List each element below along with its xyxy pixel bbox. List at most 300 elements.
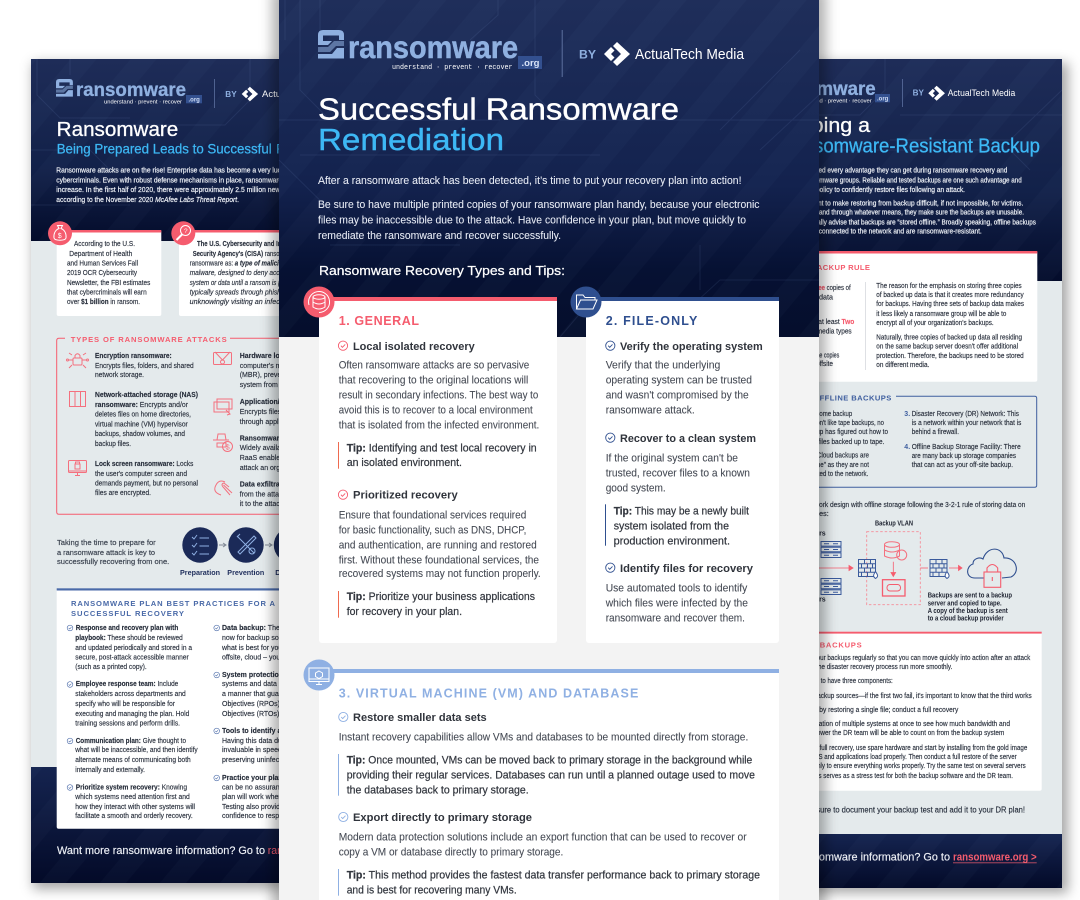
practices column 2: systems and data are <box>222 681 289 688</box>
practices column 1 <box>67 625 198 820</box>
right intro: ransomware groups. Reliable and tested backups are one such advantage and <box>804 178 1022 185</box>
left intro <box>56 168 297 204</box>
item: local isolated recovery: result in secondary infections. The best way to <box>339 389 538 401</box>
attack type list column 1: backups, shadow volumes, and <box>95 431 185 438</box>
card: 3-2-1 backup rule: for backups. Having three sets of backup data makes <box>876 301 1024 308</box>
card: 3-2-1 backup rule: at least Two <box>818 319 854 326</box>
left footer band: Want more ransomware information? Go to <box>57 845 265 857</box>
tip: once mounted: providing their regular services. Databases can run until a planned outage used to move <box>347 769 755 781</box>
right title: Developing a <box>745 115 871 137</box>
main title: Remediation <box>318 122 504 157</box>
card: testing backups: by restoring a single file; conduct a full recovery <box>819 707 959 714</box>
practices column 1: executing and managing the plan. Hold <box>75 711 189 718</box>
left title: Recovery <box>276 140 335 156</box>
attack type list column 2: (MBR), preventing <box>240 372 297 379</box>
item: restore smaller data sets: Instant recovery capabilities allow VMs and databases to be mounted directly from storage. <box>339 731 748 743</box>
icon: hardware lock <box>214 352 232 364</box>
card: CISA definition: typically spreads through phishing <box>190 290 290 297</box>
card: HHS statistic <box>57 230 161 316</box>
right footer band: Want more ransomware information? Go to <box>742 852 950 864</box>
left footer band <box>31 767 344 883</box>
icon: database restore <box>304 286 334 318</box>
tip: newly built system: system isolated from the <box>614 520 729 532</box>
connector <box>920 567 928 569</box>
practices column 2: now for backup solutions <box>222 635 300 642</box>
arrow <box>219 543 226 547</box>
panel: best practices: SUCCESSFUL RECOVERY <box>71 609 184 618</box>
practices column 1: Response and recovery plan with <box>76 625 178 632</box>
panel: virtual machine and database <box>304 660 779 900</box>
practices column 2: Having this data during <box>222 738 294 745</box>
item: restore smaller data sets: Restore smaller data sets <box>353 712 487 724</box>
panel: offline backups: behind a firewall. <box>912 429 959 436</box>
card: 3-2-1 backup rule: One copies <box>812 352 840 359</box>
item: local isolated recovery: that is isolated from the infected environment. <box>339 419 539 431</box>
practices column 1: playbook: These should be reviewed <box>75 635 183 642</box>
intro text: files may be inaccessible due to the attack. Have confidence in your plan, but move quickly to <box>318 214 746 226</box>
card: 3-2-1 backup rule: Three copies of <box>809 285 851 292</box>
item: prioritized recovery: Ensure that foundational services required <box>339 509 526 521</box>
network design caption: network design with offline storage following the 3-2-1 rule of storing data on <box>805 502 1025 509</box>
right logo: ActualTech Media <box>948 88 1016 99</box>
icon: tape <box>882 580 905 596</box>
icon: magnet <box>215 481 232 495</box>
panel: offline backups: ected to the network. <box>811 471 868 478</box>
left logo: understand · prevent · recover <box>104 99 182 105</box>
left logo: BY <box>225 90 237 99</box>
item: verify the operating system: Verify that the underlying <box>606 359 720 371</box>
tip: local recovery: Tip: Identifying and test local recovery in <box>347 442 537 454</box>
intro text: remediate the ransomware and recover successfully. <box>318 230 561 242</box>
item: prioritized recovery: and authentication, are running and restored <box>339 539 537 551</box>
card: 3-2-1 backup rule: your data <box>803 294 833 301</box>
item: prioritized recovery: for basic functionality, such as DNS, DHCP, <box>339 524 526 536</box>
left logo: ransomware <box>76 79 186 101</box>
diagram caption: A copy of the backup is sent <box>928 608 1008 615</box>
practices column 2: System protection <box>222 672 283 679</box>
item: local isolated recovery <box>338 341 539 431</box>
left logo: ActualTech <box>262 89 308 100</box>
practices column 1: training sessions and perform drills. <box>75 720 180 727</box>
right footer band: ransomware.org > <box>953 852 1037 864</box>
card: HHS statistic: Department of Health <box>69 251 132 258</box>
tip: once mounted <box>338 754 755 796</box>
item: local isolated recovery: avoid this is to recover to a local environment <box>339 404 533 416</box>
network diagram: ers <box>815 531 826 538</box>
attack type list column 2: system from getting <box>240 382 301 389</box>
main logo: BY <box>579 50 596 62</box>
attack type list column 1: Lock screen ransomware: Locks <box>95 461 194 468</box>
panel: offline backups: Offline Backup Storage Facility: There <box>912 444 1021 451</box>
item: local isolated recovery: Local isolated recovery <box>353 341 475 353</box>
left title: Ransomware <box>57 119 178 141</box>
preparation lifecycle text <box>57 538 169 566</box>
practices column 2: invaluable in speeding <box>222 747 291 754</box>
intro text <box>318 175 760 242</box>
attack type list column 2: Encrypts files <box>240 409 282 416</box>
attack type list column 2: Ransomware as <box>240 436 293 443</box>
preparation lifecycle text: Taking the time to prepare for <box>57 538 156 547</box>
card: testing backups: to have three components: <box>821 678 893 685</box>
card: CISA definition: Security Agency's (CISA) ransomw <box>193 251 289 258</box>
practices column 2: Practice your plan: <box>222 775 285 782</box>
heading: 2. file-only: 2. FILE-ONLY <box>606 314 698 328</box>
card: testing backups: OS and applications load properly. Then conduct a full restore of the server <box>814 754 1017 761</box>
main logo: .org <box>522 58 540 69</box>
item: export directly to primary storage <box>339 812 747 858</box>
right intro: connected to the network and are ransomware-resistant. <box>819 229 982 236</box>
arrow <box>265 543 272 547</box>
tip: business applications: Tip: Prioritize your business applications <box>347 591 536 603</box>
panel: offline backups: 3. <box>904 411 910 418</box>
left intro: Ransomware attacks are on the rise! Enterprise data has become a very lucrative <box>56 168 297 175</box>
diagram caption: Backups are sent to a backup <box>928 593 1012 600</box>
icon: money bag: $ <box>58 233 62 240</box>
attack type list column 1: the user's computer screen and <box>95 471 187 478</box>
icon: magnifier: ? <box>184 228 188 235</box>
item: prioritized recovery: recovered systems may not function properly. <box>339 568 541 580</box>
card: 3-2-1 backup rule: The reason for the emphasis on storing three copies <box>876 283 1022 290</box>
right logo: ransomware <box>766 78 876 100</box>
practices column 2: a manner that guarantees <box>222 691 303 698</box>
practices column 1: Employee response team: Include <box>76 681 178 688</box>
tip: once mounted: the databases back to primary storage. <box>347 784 529 796</box>
left footer band: ransomware.org <box>268 845 344 857</box>
tip: once mounted: Tip: Once mounted, VMs can be moved back to primary storage in the background while <box>347 754 752 766</box>
icon: hacker with dollar <box>213 434 232 452</box>
attack type list column 1: virtual machine (VM) hypervisor <box>95 421 188 428</box>
practices column 1: what will be inaccessible, and then identify <box>74 747 198 754</box>
attack type list column 1: Encrypts files, folders, and shared <box>95 363 194 370</box>
right logo: .org <box>877 96 889 102</box>
center page: Successful Ransomware Remediation <box>272 0 826 900</box>
icon: firewall <box>858 560 878 578</box>
card: 3-2-1 backup rule: protection. Therefore, the backups need to be stored <box>876 353 1024 360</box>
practices column 2: plan will work when <box>222 794 282 801</box>
card: HHS statistic: According to the U.S. <box>74 241 135 248</box>
panel: offline backups: don't like tape backups, no <box>813 420 884 427</box>
card: testing backups: the disaster recovery process run more smoothly. <box>816 664 952 671</box>
network design caption <box>805 502 1025 518</box>
card: testing backups: power the DR team will be able to count on from the backup system <box>813 730 1004 737</box>
icon: VM monitor <box>304 660 334 690</box>
left page: Being Prepared <box>31 59 344 889</box>
panel: offline backups: some backup <box>816 411 852 418</box>
item: prioritized recovery: Prioritized recovery <box>353 490 458 502</box>
practices column 1: Prioritize system recovery: Knowing <box>76 784 187 791</box>
card: 3-2-1 backup rule: it less likely a ransomware group will be able to <box>876 311 1006 318</box>
arrow: database to tape <box>891 562 896 576</box>
item: restore smaller data sets <box>339 712 748 743</box>
network design caption: types: <box>810 511 829 518</box>
left title <box>57 119 335 156</box>
practices column 2: Testing also provides <box>222 804 288 811</box>
left logo <box>56 79 308 108</box>
practices column 1: facilitate a smooth and orderly recovery. <box>75 813 193 820</box>
card: 3-2-1 backup rule: on the same backup server doesn't offer additional <box>876 343 1018 350</box>
card: CISA definition: malware, designed to deny access <box>190 270 290 277</box>
right intro: and through whatever means, they make sure the backups are unusable. <box>819 210 1024 217</box>
network diagram <box>815 521 1016 622</box>
icon: prevention tools <box>228 527 264 563</box>
attack type list column 2: RaaS enables <box>240 455 284 462</box>
item: verify the operating system: operating system can be trusted <box>606 374 752 386</box>
intro text: Be sure to have multiple printed copies of your ransomware plan handy, because your electronic <box>318 199 760 211</box>
right logo: BY <box>913 89 925 98</box>
panel: offline backups: is a network within your network that is <box>912 420 1022 427</box>
icon: cloud with lock <box>968 549 1016 587</box>
tip: local recovery <box>338 442 537 469</box>
practices column 1: stakeholders across departments and <box>75 691 186 698</box>
right intro: policy to confidently restore files following an attack. <box>816 187 965 194</box>
icon: network lock <box>66 353 88 368</box>
icon: NAS drives <box>70 392 86 406</box>
panel: types of ransomware attacks <box>57 335 308 514</box>
practices column 1: secure, post-attack accessible manner <box>75 654 189 661</box>
left title: Being Prepared Leads to Successful <box>57 140 272 156</box>
practices column 2: can be no assurance <box>222 784 287 791</box>
icon: hacker with dollar: $ <box>226 444 230 452</box>
practices column 2: Data backup: There are <box>222 625 298 632</box>
card: testing backups: This serves as a stress test for both the backup software and the DR team. <box>810 773 1013 780</box>
main logo <box>318 29 745 77</box>
icon: preparation checklist <box>182 527 218 563</box>
panel: offline backups: files backed up to tape. <box>818 439 884 446</box>
left intro: according to the November 2020 McAfee Labs Threat Report. <box>56 197 239 204</box>
item: export directly to primary storage: copy a VM or database directly to primary storage. <box>339 846 563 858</box>
item: export directly to primary storage: Modern data protection solutions include an export function that can be used to recover or <box>339 831 747 843</box>
attack type list column 2: Widely available <box>240 445 290 452</box>
attack type list column 1: ransomware: Encrypts and/or <box>95 402 189 409</box>
panel: offline backups: 4. <box>904 444 910 451</box>
card: HHS statistic: Newsletter, the FBI estimates <box>67 280 151 287</box>
item: prioritized recovery: first. Without these foundational services, the <box>339 554 539 566</box>
preparation lifecycle text: successfully recovering from one. <box>57 557 169 566</box>
icon: detection <box>274 527 309 563</box>
tip: business applications <box>338 591 536 618</box>
tip: fastest data transfer: Tip: This method provides the fastest data transfer performance back to primary storage <box>347 869 760 881</box>
practices column 1: how they interact with other systems will <box>75 804 195 811</box>
main title <box>318 92 679 157</box>
practices column 2: confidence to respond <box>222 813 291 820</box>
heading: 1. general: 1. GENERAL <box>339 314 419 328</box>
item: export directly to primary storage: Export directly to primary storage <box>353 812 532 824</box>
main title: Successful Ransomware <box>318 92 679 126</box>
panel: best practices <box>57 588 303 829</box>
network diagram: Backup VLAN <box>875 521 913 528</box>
panel: offline backups: Cloud backups are <box>817 453 869 460</box>
practices column 2: Objectives (RTOs) can <box>222 711 293 718</box>
practices column 2: preserving uninfected <box>222 757 289 764</box>
right intro: generally advise that backups are “stored offline.” Broadly speaking, offline backups <box>801 220 1036 227</box>
card: testing backups: only to ensure everything works properly. Try the same test on several servers <box>814 763 1026 770</box>
arrow: servers to firewall <box>815 566 853 570</box>
item: identify files for recovery: Identify files for recovery <box>620 563 753 575</box>
item: identify files for recovery: Use automated tools to identify <box>606 582 748 594</box>
lifecycle labels: Detection <box>275 568 309 577</box>
attack type list column 1: files are encrypted. <box>95 490 151 497</box>
panel: offline backups: line" as they are not <box>814 462 869 469</box>
practices column 2: Objectives (RPOs) and <box>222 701 294 708</box>
item: verify the operating system: Verify the operating system <box>620 341 763 353</box>
icon: money bag <box>48 221 72 245</box>
item: recover to a clean system: good system. <box>606 482 666 494</box>
attack type list column 2: Data exfiltration <box>240 482 293 489</box>
card: 3-2-1 backup rule: encrypt all of your organization's backups. <box>876 320 994 327</box>
card: testing backups: BACKUPS <box>820 641 862 650</box>
right intro: intent to make restoring from backup difficult, if not impossible, for victims. <box>807 200 1023 207</box>
item: local isolated recovery: Often ransomware attacks are so pervasive <box>339 359 529 371</box>
practices column 2: what is best for your <box>221 645 285 652</box>
card: 3-2-1 backup rule: media types <box>817 328 852 335</box>
attack type list column 1: network storage. <box>95 372 144 379</box>
item: recover to a clean system: If the original system can't be <box>606 452 738 464</box>
card: testing backups: Test your backups regularly so that you can move quickly into action after an attack <box>800 655 1031 662</box>
item: recover to a clean system: Recover to a clean system <box>620 433 756 445</box>
practices column 1: internally and externally. <box>75 767 145 774</box>
panel: offline backups: that can act as your off-site backup. <box>912 462 1013 469</box>
attack type list column 2: computer's memory <box>240 363 301 370</box>
tip: newly built system: production environment. <box>614 535 730 547</box>
tip: newly built system <box>605 504 749 547</box>
icon: magnifier <box>171 221 195 245</box>
panel: offline backups <box>800 394 1037 487</box>
panel: offline backups: OFFLINE BACKUPS <box>813 394 891 403</box>
diagram caption: to a cloud backup provider <box>928 615 1004 622</box>
lifecycle labels: Preparation <box>180 568 220 577</box>
attack type list column 1: Network-attached storage (NAS) <box>95 392 198 399</box>
card: HHS statistic: 2019 OCR Cybersecurity <box>67 270 137 277</box>
panel: offline backups: are many back up storage companies <box>912 453 1016 460</box>
card: CISA definition: unknowingly visiting an infected <box>190 299 291 306</box>
card: testing backups: a full recovery, use spare hardware and start by installing from the gold image <box>814 745 1027 752</box>
practices column 2: Tools to identify at <box>222 728 284 735</box>
right page: Developing a backup <box>742 59 1068 893</box>
practices column 1: specify who will be responsible for <box>75 701 176 708</box>
reminder note: Be sure to document your backup test and add it to your DR plan! <box>805 806 1025 815</box>
attack type list column 1: Encryption ransomware: <box>95 353 172 360</box>
intro text: After a ransomware attack has been detected, it’s time to put your recovery plan into action! <box>318 175 742 187</box>
item: identify files for recovery <box>605 563 753 624</box>
tip: fastest data transfer <box>338 869 760 896</box>
icon: backup database <box>884 542 907 560</box>
attack type list column 2: it to the attacker <box>240 501 290 508</box>
attack type list column 1: demands payment, but no personal <box>95 480 198 487</box>
card: CISA definition: system or data until a ransom is paid <box>190 280 291 287</box>
left logo: .org <box>188 98 200 104</box>
icon: folder <box>570 286 602 318</box>
attack type list column 2: Application/web <box>240 399 293 406</box>
right footer band <box>742 834 1062 888</box>
diagram caption <box>928 593 1012 622</box>
icon: firewall 2 <box>930 560 949 578</box>
card: CISA definition <box>179 230 291 316</box>
practices column 2: offsite, cloud – you <box>222 654 280 661</box>
preparation lifecycle text: a ransomware attack is key to <box>57 548 155 557</box>
network diagram: ers <box>815 597 826 604</box>
icon: lock screen monitor <box>68 460 86 476</box>
diagram caption: server and copied to tape. <box>928 600 1002 607</box>
icon: application windows <box>214 399 232 415</box>
practices column 1: Communication plan: Give thought to <box>76 738 186 745</box>
tip: local recovery: an isolated environment. <box>347 457 462 469</box>
right title <box>745 115 1040 158</box>
card: CISA definition: The U.S. Cybersecurity and Infra <box>197 241 289 248</box>
attack type list column 2 <box>240 353 308 508</box>
attack type list column 2: through applications <box>240 419 303 426</box>
practices column 1: which systems need attention first and <box>74 794 190 801</box>
item: local isolated recovery: that recovering to the original locations will <box>339 374 528 386</box>
attack type list column 1: backup files. <box>95 441 131 448</box>
item: recover to a clean system <box>606 433 756 494</box>
card: testing backups <box>800 632 1042 791</box>
item: prioritized recovery <box>338 490 541 580</box>
icon: servers <box>821 542 841 594</box>
practices column 1: and updated periodically and stored in a <box>75 645 192 652</box>
left intro: increase. In the first half of 2020, there were approximately 2.5 million new <box>56 187 281 194</box>
item: recover to a clean system: trusted, recover files to a known <box>606 467 750 479</box>
card: CISA definition: ransomware as: a type of malicious <box>190 261 290 268</box>
tip: business applications: for recovery in your plan. <box>347 606 462 618</box>
heading: 3. VM and database: 3. VIRTUAL MACHINE (VM) AND DATABASE <box>339 687 638 701</box>
panel: file-only <box>570 286 779 643</box>
right intro: need every advantage they can get during ransomware recovery and <box>811 168 1007 175</box>
main logo: ActualTech Media <box>635 47 745 63</box>
card: 3-2-1 backup rule: Naturally, three copies of backed up data all residing <box>876 334 1022 341</box>
item: verify the operating system <box>606 341 763 416</box>
attack type list column 1: deletes files on home directories, <box>95 412 191 419</box>
item: verify the operating system: and wasn't compromised by the <box>606 389 749 401</box>
card: testing backups: restoration of multiple systems at once to see how much bandwidth and <box>802 721 1010 728</box>
attack type list column 2: from the attacked <box>240 492 294 499</box>
right logo <box>766 78 1016 107</box>
attack type list column 1 <box>95 353 198 497</box>
right title: Ransomware-Resistant Backup <box>780 136 1040 158</box>
tip: fastest data transfer: and is best for recovering many VMs. <box>347 884 517 896</box>
card: HHS statistic: over $1 billion in ransom. <box>67 299 140 306</box>
card: 3-2-1 backup rule: BACKUP RULE <box>811 263 870 272</box>
attack type list column 2: attack an organization <box>240 465 308 472</box>
right intro <box>801 168 1036 236</box>
panel: offline backups: group has figured out how to <box>807 429 888 436</box>
panel: types of ransomware attacks: TYPES OF RANSOMWARE ATTACKS <box>71 335 227 344</box>
main logo: ransomware <box>348 29 518 65</box>
lifecycle labels <box>180 568 309 577</box>
card: HHS statistic: that cybercriminals will earn <box>67 290 147 297</box>
section heading: Ransomware Recovery Types and Tips: <box>319 263 565 278</box>
practices column 1: (such as a printed copy). <box>75 664 147 671</box>
item: identify files for recovery: which files were infected by the <box>605 597 748 609</box>
lifecycle icons <box>180 527 309 577</box>
card: 3-2-1 backup rule: on different media. <box>876 362 929 369</box>
panel: best practices: RANSOMWARE PLAN BEST PRACTICES FOR A <box>71 599 276 608</box>
panel: offline backups: Disaster Recovery (DR) Network: This <box>912 411 1019 418</box>
card: 3-2-1 backup rule <box>800 251 1037 382</box>
card: testing backups: backup sources—if the first two fail, it's important to know that the third works <box>814 693 1032 700</box>
card: 3-2-1 backup rule: of backed up data is that it creates more redundancy <box>876 292 1024 299</box>
item: verify the operating system: ransomware attack. <box>606 404 695 416</box>
practices column 1: alternate means of communicating both <box>75 757 191 764</box>
attack type list column 2: Hardware locker <box>240 353 294 360</box>
left intro: cybercriminals. Even with robust defense mechanisms in place, ransomware <box>56 177 282 184</box>
lifecycle labels: Prevention <box>227 568 264 577</box>
main logo: understand · prevent · recover <box>392 64 512 72</box>
arrow: firewall to cloud <box>949 566 962 570</box>
card: 3-2-1 backup rule: offsite <box>816 361 833 368</box>
card: HHS statistic: and Human Services Fall <box>67 261 138 268</box>
right logo: understand · prevent · recover <box>794 98 872 104</box>
panel: general <box>304 286 557 643</box>
